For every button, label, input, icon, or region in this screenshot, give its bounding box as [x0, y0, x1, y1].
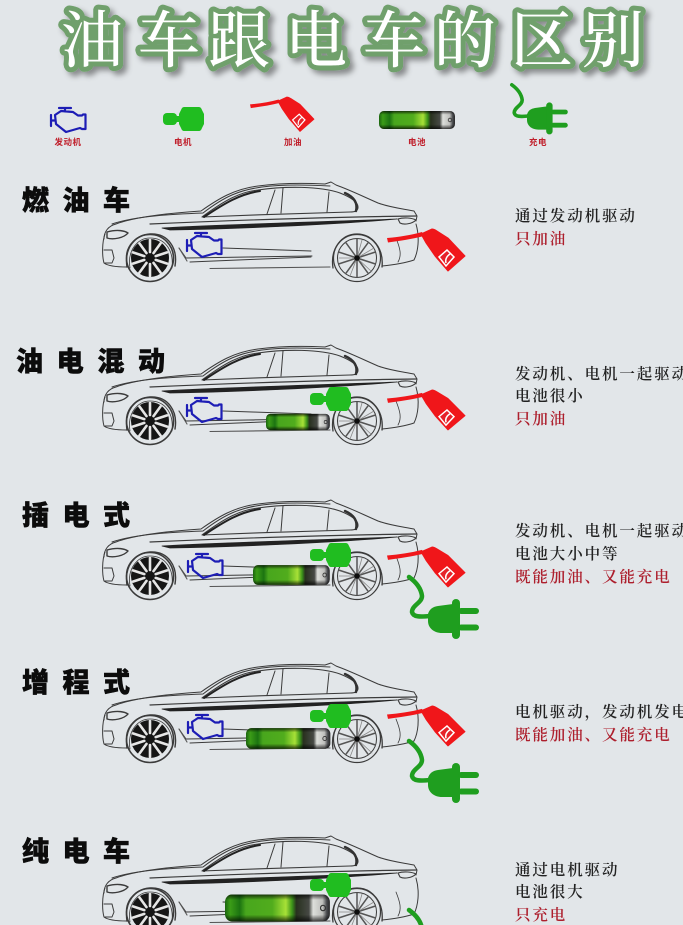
icon: charging plug legend: 充电: [529, 137, 547, 147]
icon: motor: [310, 387, 351, 411]
row: pure electric: [22, 836, 619, 925]
icon: engine legend: 发动机: [54, 137, 82, 147]
heading: plug-in hybrid: 插电式: [22, 501, 130, 531]
car illustration: pure electric: [103, 836, 418, 925]
icon: charging plug legend: [512, 85, 568, 147]
row: range extender: [22, 663, 683, 803]
description: plug-in hybrid: 既能加油、又能充电: [515, 567, 672, 586]
icon: battery: [246, 728, 330, 749]
icon: motor legend: [163, 107, 204, 147]
heading: fuel car: 燃油车: [22, 185, 130, 216]
icon: engine legend: [51, 108, 86, 147]
icon: motor legend: 电机: [174, 137, 192, 147]
row: hybrid: [16, 345, 683, 444]
description: hybrid: 只加油: [515, 409, 567, 428]
icon: battery legend: 电池: [408, 137, 426, 147]
car illustration: range extender: [103, 663, 418, 762]
legend: [51, 85, 568, 147]
description: fuel car: 只加油: [515, 229, 567, 248]
row: plug-in hybrid: [22, 500, 683, 639]
description: pure electric: 只充电: [515, 905, 567, 924]
description: fuel car: 通过发动机驱动: [515, 208, 637, 225]
heading: range extender: 增程式: [22, 668, 130, 698]
icon: engine: [187, 398, 222, 422]
icon: engine: [188, 715, 222, 739]
icon: fuel nozzle: [387, 547, 465, 587]
icon: motor: [310, 704, 351, 728]
car illustration: plug-in hybrid: [103, 500, 418, 600]
icon: battery: [225, 894, 330, 922]
icon: fuel nozzle: [387, 229, 465, 271]
icon: motor: [310, 543, 351, 567]
icon: fuel nozzle legend: 加油: [284, 137, 302, 147]
icon: battery: [266, 414, 330, 430]
description: range extender: 既能加油、又能充电: [515, 725, 672, 744]
car illustration: fuel car: [103, 182, 418, 282]
heading: hybrid: 油电混动: [16, 347, 165, 377]
description: pure electric: 电池很大: [515, 882, 585, 901]
title: 油车跟电车的区别: [61, 8, 644, 76]
row: fuel car: [22, 182, 637, 282]
icon: engine: [187, 233, 222, 257]
icon: battery: [253, 565, 330, 585]
icon: motor: [310, 873, 351, 897]
icon: charging plug: [409, 577, 479, 639]
icon: charging plug: [409, 741, 479, 803]
icon: engine: [188, 554, 222, 578]
description: plug-in hybrid: 电池大小中等: [515, 544, 619, 563]
car illustration: hybrid: [103, 345, 418, 444]
icon: battery legend: [379, 111, 455, 147]
icon: fuel nozzle: [387, 390, 465, 430]
icon: fuel nozzle legend: [250, 97, 314, 147]
description: pure electric: 通过电机驱动: [515, 862, 619, 879]
icon: charging plug: [409, 910, 479, 925]
description: hybrid: 电池很小: [515, 386, 585, 405]
icon: fuel nozzle: [387, 706, 465, 746]
heading: pure electric: 纯电车: [22, 836, 130, 867]
